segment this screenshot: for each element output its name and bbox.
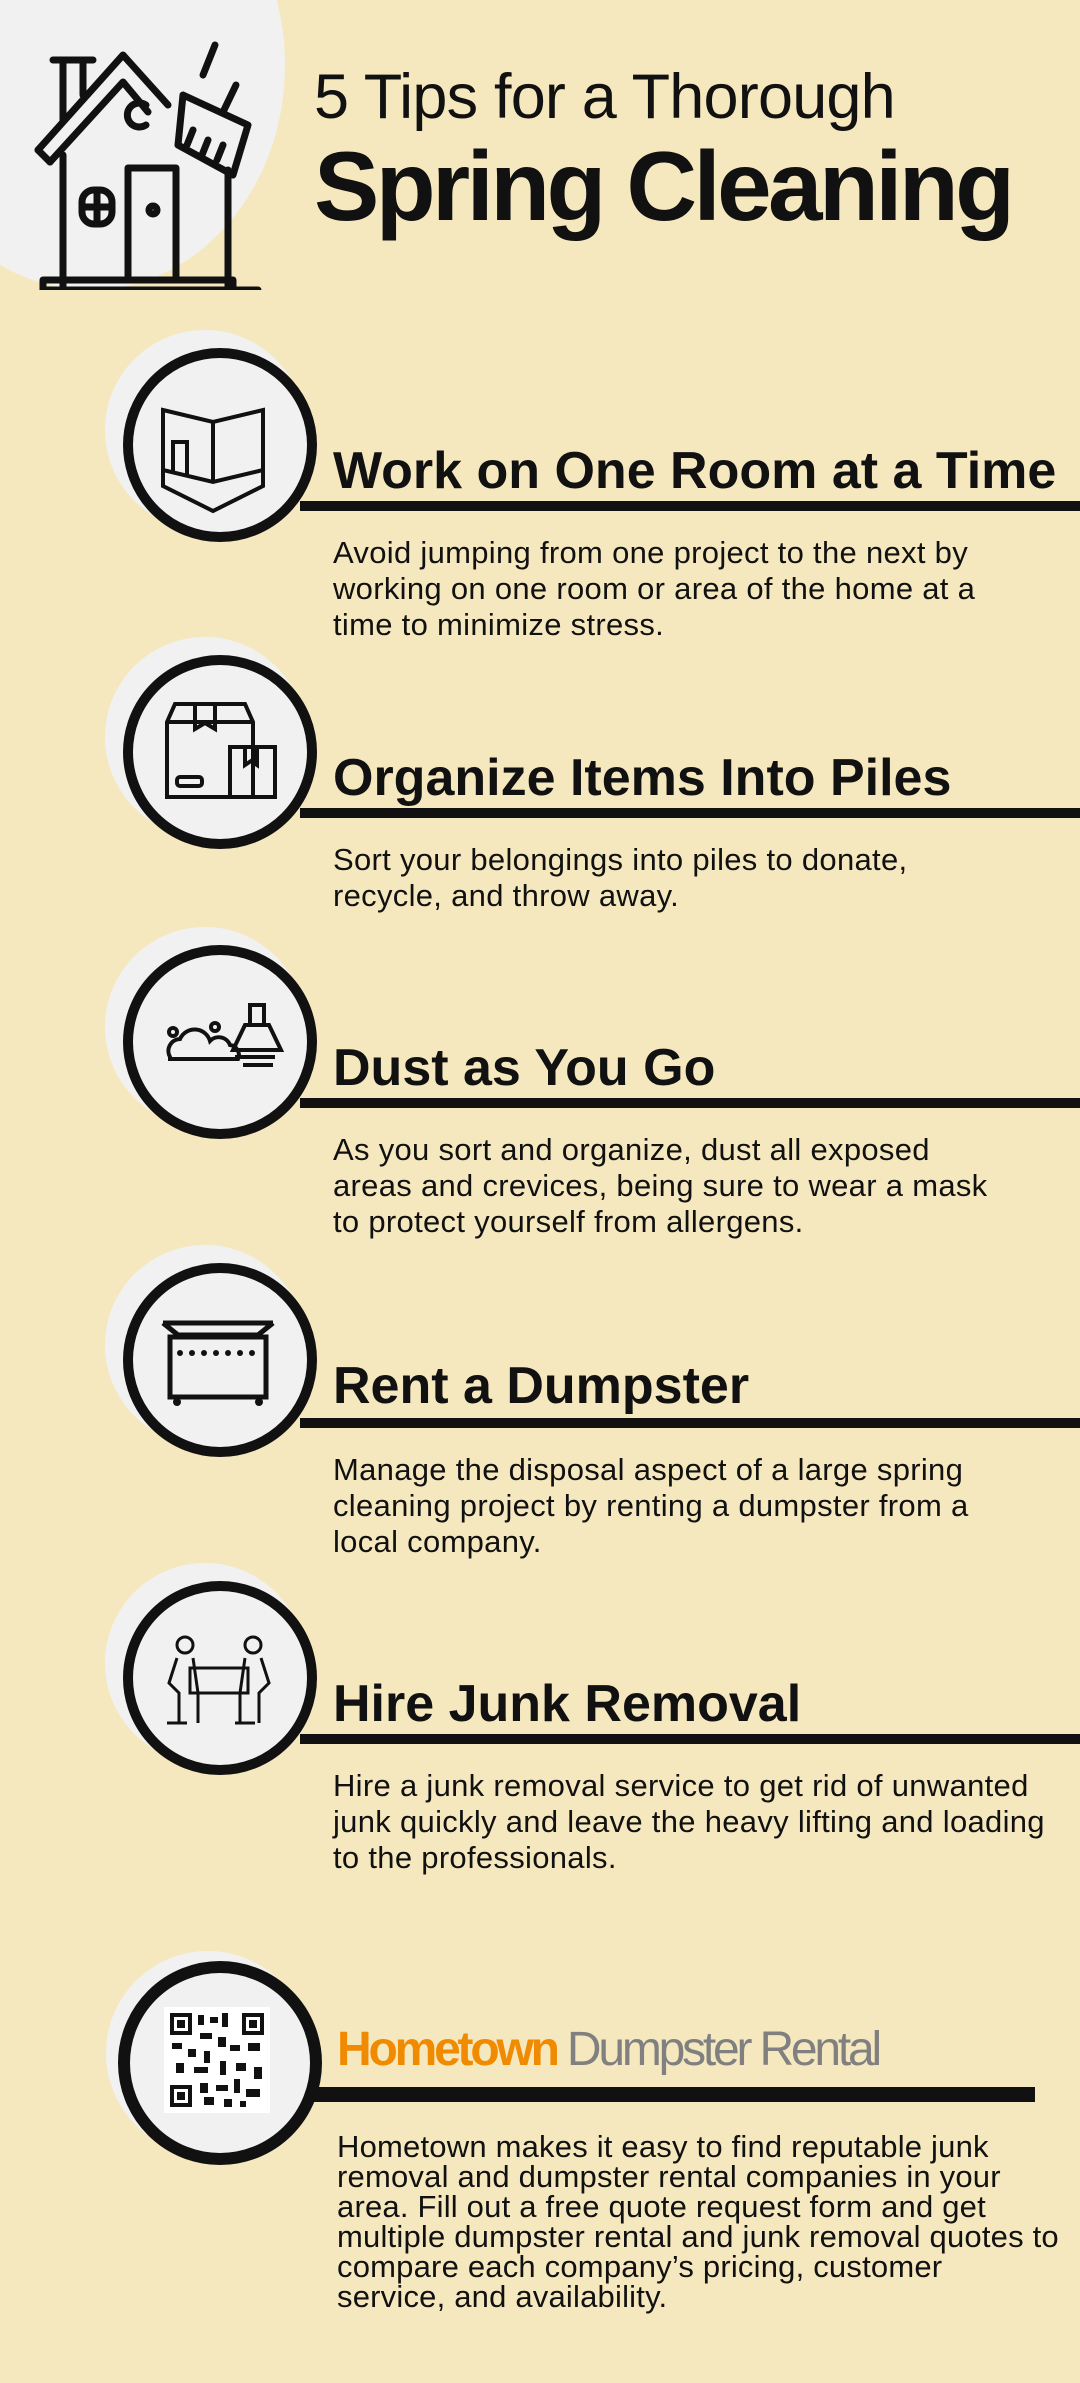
logo text: Hometown Dumpster Rental (337, 2023, 879, 2076)
body: recycle, and throw away. (333, 878, 679, 913)
icon: dust and brush (105, 927, 317, 1139)
body: junk quickly and leave the heavy lifting and loading (333, 1804, 1045, 1839)
body: Sort your belongings into piles to donate, (333, 842, 907, 877)
icon: house with brush (34, 42, 262, 290)
body: local company. (333, 1524, 542, 1559)
tip 4 (105, 1245, 1080, 1559)
body: Avoid jumping from one project to the next by (333, 535, 968, 570)
body: Hire a junk removal service to get rid of unwanted (333, 1768, 1029, 1803)
body: to protect yourself from allergens. (333, 1204, 804, 1239)
body: As you sort and organize, dust all exposed (333, 1132, 930, 1167)
icon: room (105, 330, 317, 542)
footer body: compare each company’s pricing, customer (337, 2249, 942, 2284)
body: cleaning project by renting a dumpster from a (333, 1488, 969, 1523)
body: areas and crevices, being sure to wear a mask (333, 1168, 987, 1203)
footer body: service, and availability. (337, 2279, 667, 2314)
QR circle (106, 1951, 322, 2165)
tip 5 (105, 1563, 1080, 1875)
heading: Organize Items Into Piles (333, 749, 951, 807)
body (332, 1768, 1045, 1875)
heading: Rent a Dumpster (333, 1357, 749, 1415)
heading: Hire Junk Removal (333, 1675, 801, 1733)
header decoration circle (0, 0, 285, 290)
tip 3 (105, 927, 1080, 1239)
body (333, 1132, 988, 1239)
body: time to minimize stress. (333, 607, 664, 642)
title (314, 62, 1011, 241)
tip 1 (105, 330, 1080, 642)
title: Spring Cleaning (314, 131, 1011, 241)
body: to the professionals. (333, 1840, 617, 1875)
heading: Dust as You Go (333, 1039, 715, 1097)
footer body: removal and dumpster rental companies in your (337, 2159, 1001, 2194)
footer: company (106, 1951, 1059, 2314)
title: 5 Tips for a Thorough (314, 62, 895, 132)
body (333, 1452, 969, 1559)
body (333, 535, 975, 642)
footer body (337, 2129, 1059, 2314)
icon: dumpster (105, 1245, 317, 1457)
bar (300, 2087, 1035, 2102)
footer body: multiple dumpster rental and junk removal quotes to (337, 2219, 1059, 2254)
body: Manage the disposal aspect of a large spring (333, 1452, 963, 1487)
icon: movers (105, 1563, 317, 1775)
icon: boxes (105, 637, 317, 849)
footer body: Hometown makes it easy to find reputable junk (337, 2129, 989, 2164)
tip 2 (105, 637, 1080, 913)
body: working on one room or area of the home at a (333, 571, 975, 606)
heading: Work on One Room at a Time (333, 442, 1056, 500)
footer body: area. Fill out a free quote request form and get (337, 2189, 986, 2224)
body (333, 842, 907, 913)
